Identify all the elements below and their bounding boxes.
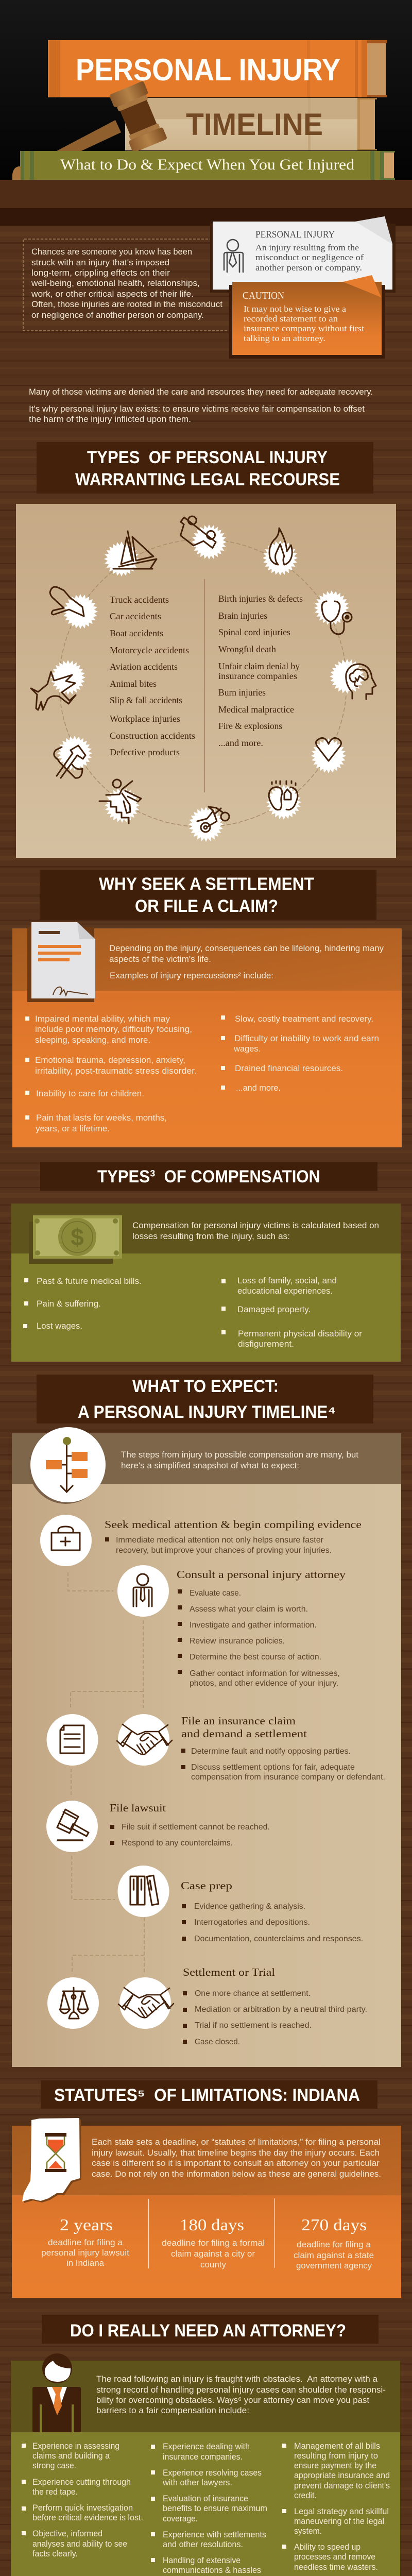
- step: case prep: [117, 1866, 363, 1943]
- step: settlement or trial: Mediation or arbitration by a neutral third party.: [195, 2005, 367, 2014]
- list: accident types: Boat accidents: [110, 628, 163, 638]
- icon: handshake: [117, 1714, 172, 1766]
- panel: injury repercussions: Examples of injury repercussions² include:: [110, 971, 273, 980]
- step: file an insurance claim: File an insurance claim: [181, 1715, 296, 1727]
- list: accident types: Slip & fall accidents: [110, 695, 182, 705]
- text block: why the law exists: It's why personal injury law exists: to ensure victims receive fair compensation to offset: [29, 404, 365, 414]
- list: repercussions, right column: Drained financial resources.: [235, 1063, 343, 1073]
- panel: timeline: The steps from injury to possible compensation are many, but: [121, 1450, 358, 1460]
- panel: statutes: [12, 2118, 401, 2298]
- icon: brain in head: [330, 659, 376, 699]
- icon: binders: [117, 1866, 169, 1917]
- intro text in dashed frame: struck with an injury that's imposed: [31, 258, 169, 267]
- list: benefits, column one: Objective, informed: [32, 2529, 102, 2538]
- definition card: personal injury: another person or company.: [255, 263, 362, 273]
- list: benefits, column two: communications & hassles: [163, 2565, 261, 2575]
- panel: statutes: case. Do not rely on the information below as these are general guidelines.: [92, 2169, 381, 2179]
- caution note: It may not be wise to give a: [244, 304, 347, 314]
- stat: 2 years: [41, 2215, 129, 2268]
- panel: compensation: [11, 1204, 401, 1362]
- list: benefits, column two: coverage.: [163, 2514, 198, 2523]
- list: benefits, column two: Handling of extensive: [163, 2555, 241, 2565]
- list: compensation, right column: Damaged property.: [237, 1304, 311, 1314]
- heading: what to expect: A PERSONAL INJURY TIMELINE⁴: [78, 1402, 336, 1422]
- book: subtitle: What to Do & Expect When You Get Injured: [60, 156, 354, 173]
- step: settlement or trial: Trial if no settlement is reached.: [195, 2021, 312, 2030]
- list: benefits, column three: Legal strategy and skillful: [294, 2506, 389, 2516]
- list: benefits, column two: with other lawyers.: [162, 2478, 232, 2487]
- list: benefits, column three: prevent damage to client's: [294, 2481, 390, 2490]
- step: consult an attorney: Assess what your claim is worth.: [190, 1605, 308, 1614]
- heading: what to expect: WHAT TO EXPECT:: [132, 1377, 279, 1396]
- list: accident types: Car accidents: [110, 611, 161, 621]
- list: compensation, right column: Loss of family, social, and: [237, 1276, 337, 1285]
- list: injury types: Spinal cord injuries: [218, 627, 290, 637]
- icon: gavel: [46, 1801, 98, 1852]
- stat: 180 days: county: [200, 2260, 226, 2269]
- list: benefits, column two: insurance companies.: [163, 2452, 243, 2462]
- caution note: CAUTION: [243, 290, 284, 301]
- step: file lawsuit: Respond to any counterclaims.: [122, 1839, 233, 1848]
- heading: why seek a settlement: OR FILE A CLAIM?: [135, 896, 278, 916]
- stat: 180 days: deadline for filing a formal: [162, 2238, 265, 2248]
- list: benefits, column three: [282, 2441, 390, 2572]
- stat: 270 days: [294, 2215, 374, 2270]
- definition card: personal injury: misconduct or negligence of: [255, 252, 364, 262]
- list: compensation, right column: Permanent physical disability or: [238, 1329, 362, 1338]
- caution note: insurance company without first: [244, 324, 364, 333]
- step: file an insurance claim: Discuss settlement options for fair, adequate: [191, 1763, 355, 1772]
- stat: 2 years: deadline for filing a: [48, 2238, 123, 2247]
- step: file an insurance claim: Determine fault and notify opposing parties.: [191, 1747, 351, 1756]
- list: benefits, column two: Experience resolving cases: [163, 2468, 262, 2478]
- panel: compensation: losses resulting from the injury, such as:: [132, 1231, 290, 1241]
- icon: timeline badge: [28, 1427, 106, 1504]
- step: seek medical attention: Seek medical attention & begin compiling evidence: [105, 1518, 362, 1531]
- list: accident types: Construction accidents: [110, 731, 195, 741]
- panel: attorney benefits: The road following an injury is fraught with obstacles. An attorney with a: [96, 2374, 378, 2384]
- text block: why the law exists: [29, 387, 373, 424]
- caution note: talking to an attorney.: [244, 333, 325, 343]
- list: benefits, column three: resulting from injury to: [294, 2451, 378, 2461]
- list: benefits, column one: analyses and ability to see: [32, 2539, 127, 2549]
- list: repercussions, right column: [221, 1014, 379, 1093]
- heading: types of personal injury: TYPES OF PERSONAL INJURY: [87, 448, 328, 467]
- step: file an insurance claim: and demand a settlement: [181, 1727, 307, 1740]
- list: injury types: Fire & explosions: [218, 721, 282, 731]
- list: benefits, column three: appropriate insurance and: [294, 2470, 390, 2480]
- icon: scales of justice: [47, 1977, 99, 2029]
- list: injury types: Birth injuries & defects: [218, 594, 303, 604]
- list: injury types: [218, 594, 303, 748]
- list: benefits, column one: strong case.: [32, 2461, 76, 2470]
- list: accident types: Animal bites: [110, 679, 157, 689]
- panel: attorney benefits: barriers to a fair compensation include:: [96, 2405, 249, 2415]
- heading: types of compensation: TYPES³ OF COMPENSATION: [97, 1167, 320, 1187]
- panel: injury repercussions: [12, 922, 402, 1147]
- list: compensation, left column: [23, 1276, 142, 1331]
- book: timeline: [125, 98, 377, 150]
- intro text in dashed frame: [23, 239, 228, 331]
- icon: motorcycle: [188, 807, 229, 842]
- list: injury types: Wrongful death: [218, 644, 276, 654]
- list: benefits, column three: maneuvering of the legal: [294, 2516, 384, 2526]
- step: file an insurance claim: [46, 1714, 385, 1782]
- caution note: [229, 275, 385, 359]
- list: repercussions, left column: Emotional trauma, depression, anxiety,: [35, 1055, 185, 1065]
- list: benefits, column two: Experience dealing with: [163, 2442, 250, 2451]
- list: benefits, column three: processes and remove: [294, 2552, 375, 2562]
- heading: types of personal injury: WARRANTING LEGAL RECOURSE: [75, 470, 340, 489]
- list: injury types: insurance companies: [218, 671, 297, 681]
- list: injury types: Unfair claim denial by: [218, 661, 300, 671]
- step: file lawsuit: [46, 1801, 270, 1852]
- list: repercussions, left column: irritability, post-traumatic stress disorder.: [35, 1066, 197, 1076]
- list: benefits, column three: needless time wasters.: [294, 2562, 378, 2572]
- heading: types of compensation: [40, 1162, 377, 1191]
- book: personal injury: [48, 40, 387, 97]
- icon: fire: [263, 528, 298, 575]
- caution note: recorded statement to an: [244, 314, 338, 324]
- panel: attorney benefits: bility for overcoming obstacles. Ways⁶ your attorney can move you past: [96, 2395, 369, 2405]
- definition card: personal injury: [210, 216, 396, 293]
- step: consult an attorney: Evaluate case.: [190, 1589, 241, 1598]
- header: book stack title: [0, 0, 412, 180]
- stat: 270 days: government agency: [296, 2261, 372, 2270]
- list: accident types: Workplace injuries: [110, 714, 180, 724]
- icon: medical bag: [40, 1515, 92, 1566]
- list: benefits, column one: Experience cutting through: [32, 2477, 131, 2487]
- panel: injury repercussions: aspects of the victim's life.: [109, 954, 211, 964]
- step: case prep: Documentation, counterclaims and responses.: [194, 1935, 363, 1943]
- list: repercussions, left column: [25, 1014, 197, 1133]
- icon: slip and fall: [99, 779, 141, 823]
- list: benefits, column three: Management of all bills: [294, 2441, 380, 2451]
- list: repercussions, left column: sleeping, speaking, and more.: [35, 1035, 150, 1045]
- wooden table edge: [0, 180, 412, 226]
- list: repercussions, left column: years, or a lifetime.: [36, 1124, 110, 1133]
- list: compensation, right column: [221, 1276, 362, 1349]
- list: accident types: Aviation accidents: [110, 662, 178, 672]
- list: benefits, column three: system.: [294, 2526, 322, 2536]
- icon: dollar bill: $: [71, 1224, 84, 1250]
- list: benefits, column two: benefits to ensure maximum: [163, 2503, 267, 2513]
- list: repercussions, right column: ...and more.: [236, 1083, 281, 1093]
- step: seek medical attention: Immediate medical attention not only helps ensure faster: [116, 1536, 324, 1545]
- icon: dollar bill: [29, 1215, 122, 1264]
- step: consult an attorney: Consult a personal injury attorney: [177, 1568, 346, 1581]
- list: repercussions, right column: Slow, costly treatment and recovery.: [235, 1014, 373, 1024]
- icon: car crash: [174, 512, 227, 560]
- step: case prep: Interrogatories and depositions.: [194, 1918, 310, 1927]
- list: repercussions, left column: Impaired mental ability, which may: [35, 1014, 170, 1024]
- step: settlement or trial: [47, 1966, 367, 2046]
- step: case prep: Evidence gathering & analysis.: [194, 1902, 305, 1911]
- stat: 270 days: claim against a state: [294, 2250, 374, 2260]
- panel: statutes: case is different so it is important to consult an attorney on your particular: [92, 2158, 380, 2168]
- heading: why seek a settlement: [40, 870, 376, 920]
- intro text in dashed frame: work, or other critical aspects of their life.: [31, 289, 194, 299]
- book: personal injury: PERSONAL INJURY: [76, 53, 340, 87]
- list: benefits, column one: claims and building a: [32, 2451, 110, 2461]
- step: seek medical attention: recovery, but improve your chances of proving your injuries.: [116, 1546, 332, 1555]
- list: repercussions, right column: wages.: [233, 1044, 261, 1054]
- step: settlement or trial: Case closed.: [195, 2038, 240, 2046]
- icon: attorney: [117, 1565, 169, 1617]
- list: benefits, column one: the red tape.: [32, 2487, 78, 2497]
- list: injury types: ...and more.: [218, 738, 263, 748]
- list: benefits, column three: credit.: [294, 2490, 317, 2500]
- list: accident types: [110, 595, 195, 757]
- stat: 180 days: claim against a city or: [171, 2249, 255, 2259]
- list: injury types: Burn injuries: [218, 687, 266, 698]
- intro text in dashed frame: well-being, emotional health, relationships,: [31, 278, 200, 288]
- list: compensation, left column: Lost wages.: [37, 1321, 82, 1331]
- intro text in dashed frame: long-term, crippling effects on their: [31, 268, 170, 278]
- intro text in dashed frame: Chances are someone you know has been: [31, 247, 192, 257]
- icon: feet with toe tag: [266, 781, 301, 820]
- icon: sailboat: [104, 531, 157, 577]
- book: subtitle: [20, 151, 395, 180]
- panel: statutes: Each state sets a deadline, or “statutes of limitations,” for filing a personal: [92, 2137, 381, 2147]
- step: consult an attorney: Investigate and gather information.: [190, 1621, 317, 1630]
- list: compensation, left column: Pain & suffering.: [37, 1299, 101, 1309]
- book: timeline: TIMELINE: [186, 107, 323, 142]
- stat: 180 days: [162, 2215, 265, 2269]
- panel: attorney benefits: strong record of handling personal injury cases can shoulder the responsi-: [96, 2385, 386, 2395]
- list: compensation, left column: Past & future medical bills.: [37, 1276, 142, 1286]
- step: consult an attorney: [117, 1565, 346, 1688]
- list: benefits, column two: Experience with settlements: [163, 2530, 266, 2539]
- text block: why the law exists: the harm of the injury inflicted upon them.: [29, 414, 191, 424]
- icon: settlement handshake: [118, 1977, 174, 2029]
- icon: airplane: [50, 587, 98, 629]
- list: benefits, column one: before critical evidence is lost.: [32, 2513, 143, 2522]
- list: benefits, column one: facts clearly.: [32, 2549, 78, 2558]
- list: benefits, column three: ensure payment by the: [294, 2461, 376, 2470]
- list: compensation, right column: disfigurement.: [238, 1339, 294, 1349]
- icon: claim document: [46, 1714, 98, 1766]
- icon: person: [224, 240, 243, 272]
- list: benefits, column one: Experience in assessing: [32, 2441, 119, 2451]
- definition card: personal injury: An injury resulting from the: [255, 243, 359, 252]
- intro text in dashed frame: Often, those injuries are rooted in the misconduct: [31, 299, 222, 309]
- panel: injury types wheel: [16, 504, 396, 858]
- heading: statutes of limitations: STATUTES⁵ OF LIMITATIONS: INDIANA: [54, 2086, 360, 2105]
- icon: heart: [311, 738, 346, 773]
- list: accident types: Truck accidents: [110, 595, 169, 605]
- icon: wrench and hammer: [54, 736, 92, 778]
- list: benefits, column one: [22, 2441, 143, 2558]
- panel: timeline: [12, 1427, 401, 2067]
- intro text in dashed frame: or negligence of another person or company.: [31, 310, 204, 320]
- text block: why the law exists: Many of those victims are denied the care and resources they need for adequate recovery.: [29, 387, 373, 397]
- list: accident types: Motorcycle accidents: [110, 645, 189, 655]
- list: compensation, right column: educational experiences.: [237, 1286, 333, 1296]
- icon: stethoscope: [314, 590, 352, 634]
- stat: 180 days: 180 days: [180, 2215, 244, 2234]
- panel: timeline: here's a simplified snapshot of what to expect:: [121, 1461, 299, 1470]
- stat: 2 years: in Indiana: [66, 2258, 105, 2268]
- step: settlement or trial: Settlement or Trial: [183, 1966, 275, 1978]
- stat: 2 years: 2 years: [60, 2215, 113, 2234]
- step: case prep: Case prep: [181, 1879, 232, 1892]
- list: benefits, column two: Evaluation of insurance: [163, 2494, 248, 2503]
- step: file lawsuit: File lawsuit: [110, 1802, 166, 1814]
- step: file lawsuit: File suit if settlement cannot be reached.: [122, 1823, 270, 1832]
- stat: 270 days: 270 days: [301, 2215, 367, 2234]
- icon: dog: [31, 660, 85, 710]
- panel: attorney benefits: [11, 2353, 400, 2576]
- definition card: personal injury: PERSONAL INJURY: [255, 229, 335, 240]
- step: consult an attorney: photos, and other evidence of your injury.: [190, 1679, 338, 1688]
- heading: do i need an attorney: DO I REALLY NEED AN ATTORNEY?: [70, 2321, 346, 2341]
- gavel head: [109, 81, 167, 153]
- list: accident types: Defective products: [110, 747, 180, 757]
- list: injury types: Brain injuries: [218, 611, 267, 621]
- step: file an insurance claim: compensation from insurance company or defendant.: [191, 1773, 385, 1782]
- panel: compensation: Compensation for personal injury victims is calculated based on: [132, 1221, 379, 1230]
- heading: types of personal injury: [37, 442, 373, 494]
- step: consult an attorney: Review insurance policies.: [190, 1637, 285, 1646]
- stat: 270 days: deadline for filing a: [297, 2240, 371, 2249]
- list: injury types: Medical malpractice: [218, 704, 294, 715]
- list: benefits, column two: and other resolutions.: [163, 2539, 243, 2549]
- step: consult an attorney: Determine the best course of action.: [190, 1653, 321, 1662]
- heading: statutes of limitations: [41, 2080, 377, 2109]
- step: consult an attorney: Gather contact information for witnesses,: [190, 1669, 340, 1678]
- stat: 2 years: personal injury lawsuit: [41, 2248, 129, 2258]
- icon: indiana map with hourglass: [22, 2118, 81, 2203]
- step: seek medical attention: [40, 1515, 362, 1566]
- panel: statutes: injury lawsuit. Usually, that timeline begins the day the injury occurs. Each: [92, 2148, 380, 2158]
- heading: what to expect: [37, 1375, 373, 1423]
- connector lines: [68, 1572, 144, 1973]
- panel: injury repercussions: Depending on the injury, consequences can be lifelong, hindering many: [109, 943, 384, 953]
- list: benefits, column two: [151, 2442, 269, 2576]
- icon: attorney figure: [32, 2353, 81, 2432]
- gavel handle and knob: [12, 120, 121, 180]
- list: repercussions, left column: Inability to care for children.: [36, 1089, 144, 1098]
- list: repercussions, left column: Pain that lasts for weeks, months,: [36, 1113, 167, 1123]
- list: benefits, column three: Ability to speed up: [294, 2542, 360, 2552]
- heading: why seek a settlement: WHY SEEK A SETTLEMENT: [99, 874, 314, 894]
- heading: do i need an attorney: [42, 2315, 379, 2344]
- list: repercussions, left column: include poor memory, difficulty focusing,: [35, 1024, 192, 1034]
- list: benefits, column one: Perform quick investigation: [32, 2503, 133, 2513]
- icon: signed document: [27, 922, 95, 1002]
- step: settlement or trial: One more chance at settlement.: [195, 1989, 311, 1998]
- list: repercussions, right column: Difficulty or inability to work and earn: [234, 1033, 379, 1043]
